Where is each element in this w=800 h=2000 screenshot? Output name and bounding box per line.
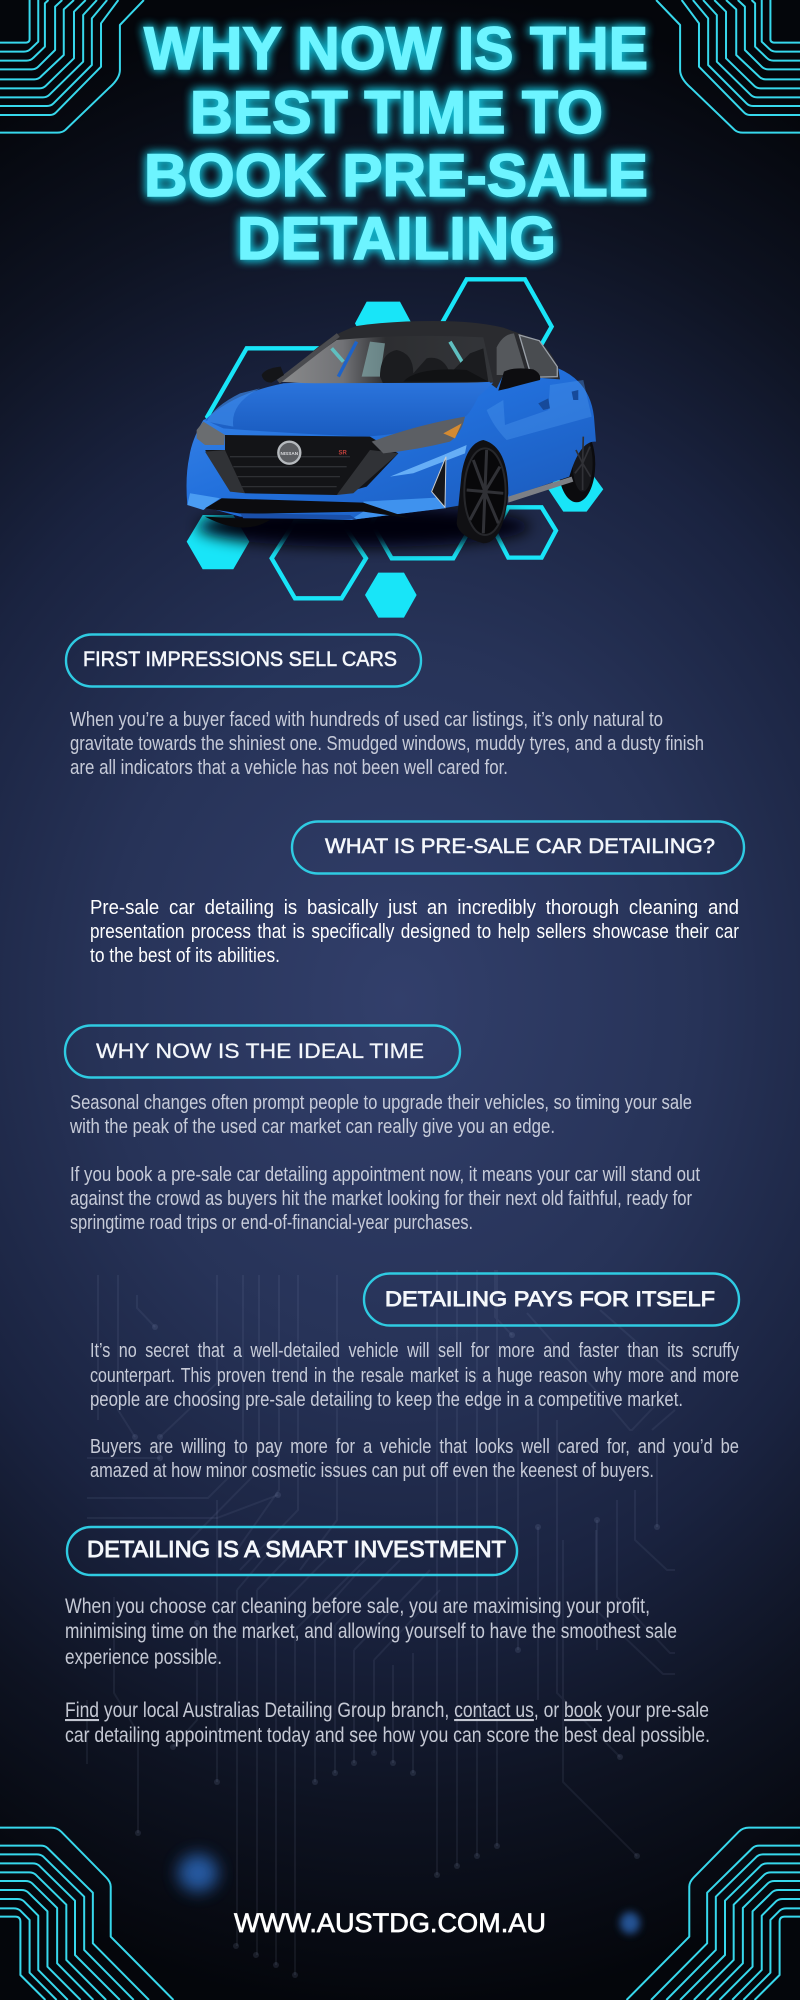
body text: When you’re a buyer faced with hundreds of used car listings, it’s only natural to	[70, 709, 663, 731]
section 1: first impressions	[66, 634, 704, 779]
body text	[69, 1092, 700, 1234]
body text: people are choosing pre-sale detailing to keep the edge in a competitive market.	[90, 1389, 683, 1411]
body text	[90, 1340, 739, 1482]
body text: Pre-sale car detailing is basically just an incredibly thorough cleaning and	[90, 897, 739, 919]
glow: blue light right	[620, 1912, 640, 1934]
glow: blue light left	[178, 1854, 218, 1892]
right headlight	[372, 417, 465, 453]
section 5: detailing is a smart investment	[65, 1527, 710, 1747]
SR badge: SR	[338, 450, 347, 456]
front-left tyre	[205, 517, 270, 528]
body text: Seasonal changes often prompt people to upgrade their vehicles, so timing your sale	[70, 1092, 692, 1114]
body text	[70, 709, 704, 779]
title: BOOK PRE-SALE	[144, 142, 648, 209]
body text: amazed at how minor cosmetic issues can put off even the keenest of buyers.	[90, 1460, 654, 1482]
a-pillar	[278, 335, 338, 382]
body text: When you choose car cleaning before sale, you are maximising your profit,	[65, 1595, 650, 1618]
left headlight	[197, 422, 225, 445]
body text	[65, 1595, 710, 1747]
body side	[187, 368, 596, 520]
heading pill: FIRST IMPRESSIONS SELL CARS	[83, 648, 397, 671]
door mirror reflections	[538, 390, 578, 410]
right mirror	[498, 368, 540, 391]
badge: NISSAN	[281, 451, 299, 456]
body text: with the peak of the used car market can really give you an edge.	[69, 1116, 555, 1138]
rear wheel	[558, 426, 595, 502]
badge	[278, 442, 300, 464]
side vent	[432, 457, 446, 507]
body text: springtime road trips or end-of-financial-year purchases.	[70, 1212, 473, 1234]
hood	[205, 383, 493, 437]
front wheel	[457, 440, 508, 543]
left mirror	[262, 367, 284, 383]
heading pill	[364, 1274, 739, 1326]
interior seats	[380, 348, 488, 384]
body text: to the best of its abilities.	[90, 945, 280, 967]
heading pill	[292, 822, 744, 874]
side windows	[497, 333, 527, 375]
door highlight	[487, 380, 592, 440]
body text: minimising time on the market, and allowing yourself to have the smoothest sale	[65, 1620, 677, 1643]
roof	[297, 321, 560, 388]
side skirt	[508, 477, 573, 503]
heading pill	[66, 634, 421, 686]
fender highlight band	[390, 445, 467, 477]
body text: experience possible.	[65, 1646, 222, 1669]
heading pill	[67, 1527, 517, 1575]
car shadow	[197, 506, 530, 547]
car	[187, 321, 596, 543]
hexagon decoration	[187, 279, 603, 618]
rear wheel rim highlight	[575, 437, 591, 490]
heading pill: WHAT IS PRE-SALE CAR DETAILING?	[325, 835, 715, 858]
hero: car with hexagons	[187, 279, 603, 618]
website url: WWW.AUSTDG.COM.AU	[234, 1908, 546, 1938]
body text: against the crowd as buyers hit the market looking for their next old faithful, ready for	[70, 1188, 692, 1210]
corner lines: bottom left	[0, 1828, 173, 2000]
heading pill: DETAILING PAYS FOR ITSELF	[385, 1288, 715, 1311]
section 3: why now is the ideal time	[65, 1026, 700, 1234]
title: BEST TIME TO	[190, 79, 603, 146]
body text: Find your local Australias Detailing Group branch, contact us, or book your pre-sale	[65, 1699, 709, 1722]
hood crease	[207, 388, 260, 427]
corner lines: bottom right	[627, 1828, 800, 2000]
corner lines: top right	[656, 0, 800, 133]
grille	[205, 435, 398, 495]
section 2: what is pre-sale car detailing	[90, 822, 744, 967]
lower intake	[205, 498, 410, 518]
body text: If you book a pre-sale car detailing appointment now, it means your car will stand out	[70, 1164, 700, 1186]
windshield	[278, 336, 493, 385]
heading pill: WHY NOW IS THE IDEAL TIME	[96, 1040, 424, 1063]
section 4: detailing pays for itself	[90, 1274, 739, 1482]
body text	[90, 897, 739, 967]
title: DETAILING	[237, 205, 556, 272]
heading pill: DETAILING IS A SMART INVESTMENT	[87, 1536, 506, 1562]
circuit board background pattern	[87, 1270, 680, 1978]
lower bumper	[187, 493, 220, 510]
body text: are all indicators that a vehicle has not been well cared for.	[70, 757, 508, 779]
title: WHY NOW IS THE	[144, 15, 648, 82]
heading pill	[65, 1026, 460, 1078]
title	[144, 15, 648, 272]
corner lines: top left	[0, 0, 144, 133]
